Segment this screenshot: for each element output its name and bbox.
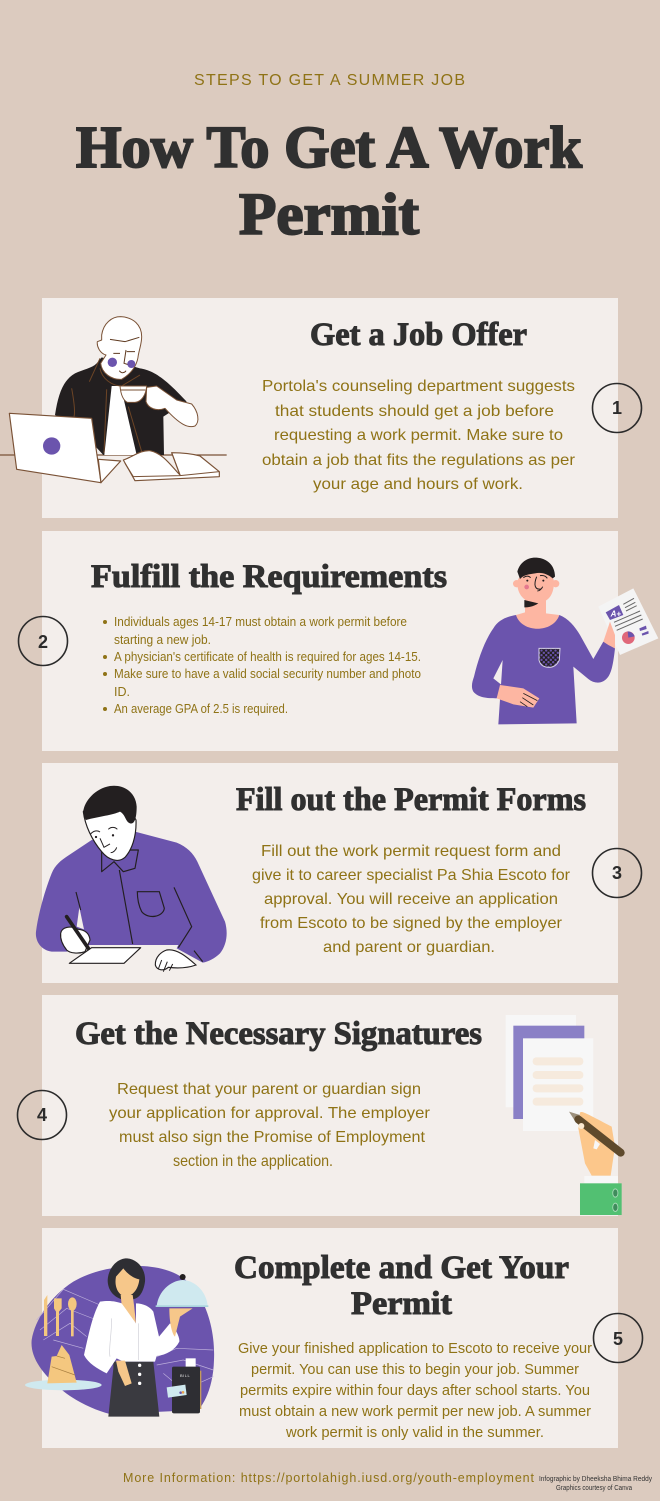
- body text: your age and hours of work.: [313, 476, 523, 493]
- panel: step 2 fulfill the requirements: [42, 531, 658, 751]
- panel: step 3 fill out the permit forms: [36, 763, 618, 983]
- step number 3: [592, 848, 642, 898]
- illustration: man with coffee and laptop: [0, 317, 227, 483]
- body text: [262, 378, 576, 493]
- bullet list: Individuals ages 14-17 must obtain a work permit before: [114, 615, 407, 629]
- body text: obtain a job that fits the regulations as per: [262, 452, 576, 469]
- step number 1: 1: [612, 398, 622, 418]
- body text: from Escoto to be signed by the employer: [260, 915, 563, 932]
- bullet list: ID.: [114, 685, 130, 699]
- body text: must obtain a new work permit per new job. A summer: [239, 1403, 591, 1420]
- bullet list: starting a new job.: [114, 633, 211, 647]
- body text: that students should get a job before: [275, 403, 554, 420]
- illustration: student holding A+ paper: A+: [610, 610, 621, 619]
- bullet list: An average GPA of 2.5 is required.: [114, 702, 288, 716]
- bullet list: Make sure to have a valid social security number and photo: [114, 667, 421, 681]
- body text: give it to career specialist Pa Shia Escoto for: [252, 867, 571, 884]
- body text: must also sign the Promise of Employment: [119, 1129, 426, 1146]
- heading: Fulfill the Requirements: [91, 559, 447, 595]
- heading: Permit: [351, 1286, 452, 1322]
- heading: Get a Job Offer: [310, 317, 527, 353]
- illustration: waitress with tray and bill: BILL: [180, 1373, 190, 1378]
- illustration: waitress with tray and bill: [25, 1258, 214, 1417]
- body text: Request that your parent or guardian sign: [117, 1081, 421, 1098]
- step number 5: [594, 1314, 642, 1362]
- body text: permit. You can use this to begin your job. Summer: [251, 1361, 579, 1378]
- illustration: hand signing papers: [506, 1015, 622, 1215]
- body text: [252, 843, 571, 956]
- panel: step 1 get a job offer: [0, 298, 618, 518]
- illustration: man writing on form: [36, 786, 227, 972]
- credits: Graphics courtesy of Canva: [556, 1485, 632, 1492]
- subtitle: STEPS TO GET A SUMMER JOB: [194, 72, 465, 89]
- body text: work permit is only valid in the summer.: [285, 1424, 544, 1441]
- body text: your application for approval. The employer: [109, 1105, 431, 1122]
- panel: step 5 complete and get your permit: [25, 1228, 618, 1448]
- body text: approval. You will receive an application: [264, 891, 558, 908]
- illustration: student holding A+ paper: [472, 558, 658, 724]
- body text: section in the application.: [173, 1153, 333, 1170]
- bullet list: [103, 615, 421, 716]
- step number 4: 4: [37, 1105, 47, 1125]
- body text: [109, 1081, 431, 1170]
- title: Permit: [239, 181, 419, 247]
- title: How To Get A Work: [76, 114, 582, 180]
- body text: Give your finished application to Escoto to receive your: [238, 1340, 592, 1357]
- heading: [234, 1250, 569, 1322]
- step number 3: 3: [612, 863, 622, 883]
- heading: Complete and Get Your: [234, 1250, 569, 1286]
- body text: Portola's counseling department suggests: [262, 378, 575, 395]
- step number 2: 2: [38, 632, 48, 652]
- body text: requesting a work permit. Make sure to: [274, 427, 563, 444]
- heading: Fill out the Permit Forms: [236, 782, 586, 818]
- heading: Get the Necessary Signatures: [75, 1016, 482, 1052]
- step number 5: 5: [613, 1329, 623, 1349]
- body text: Fill out the work permit request form and: [261, 843, 561, 860]
- bullet list: A physician's certificate of health is required for ages 14-15.: [114, 650, 421, 664]
- title: [76, 114, 582, 247]
- step number 2: [18, 616, 68, 666]
- step number 4: [18, 1090, 66, 1140]
- body text: [238, 1340, 592, 1441]
- footer link: More Information: https://portolahigh.iusd.org/youth-employment: [123, 1471, 535, 1485]
- credits: Infographic by Dheeksha Bhima Reddy: [539, 1476, 652, 1483]
- credits: [539, 1476, 652, 1492]
- step number 1: [592, 384, 642, 432]
- body text: permits expire within four days after school starts. You: [240, 1382, 590, 1399]
- panel: step 4 get the necessary signatures: [42, 995, 622, 1216]
- body text: and parent or guardian.: [323, 939, 495, 956]
